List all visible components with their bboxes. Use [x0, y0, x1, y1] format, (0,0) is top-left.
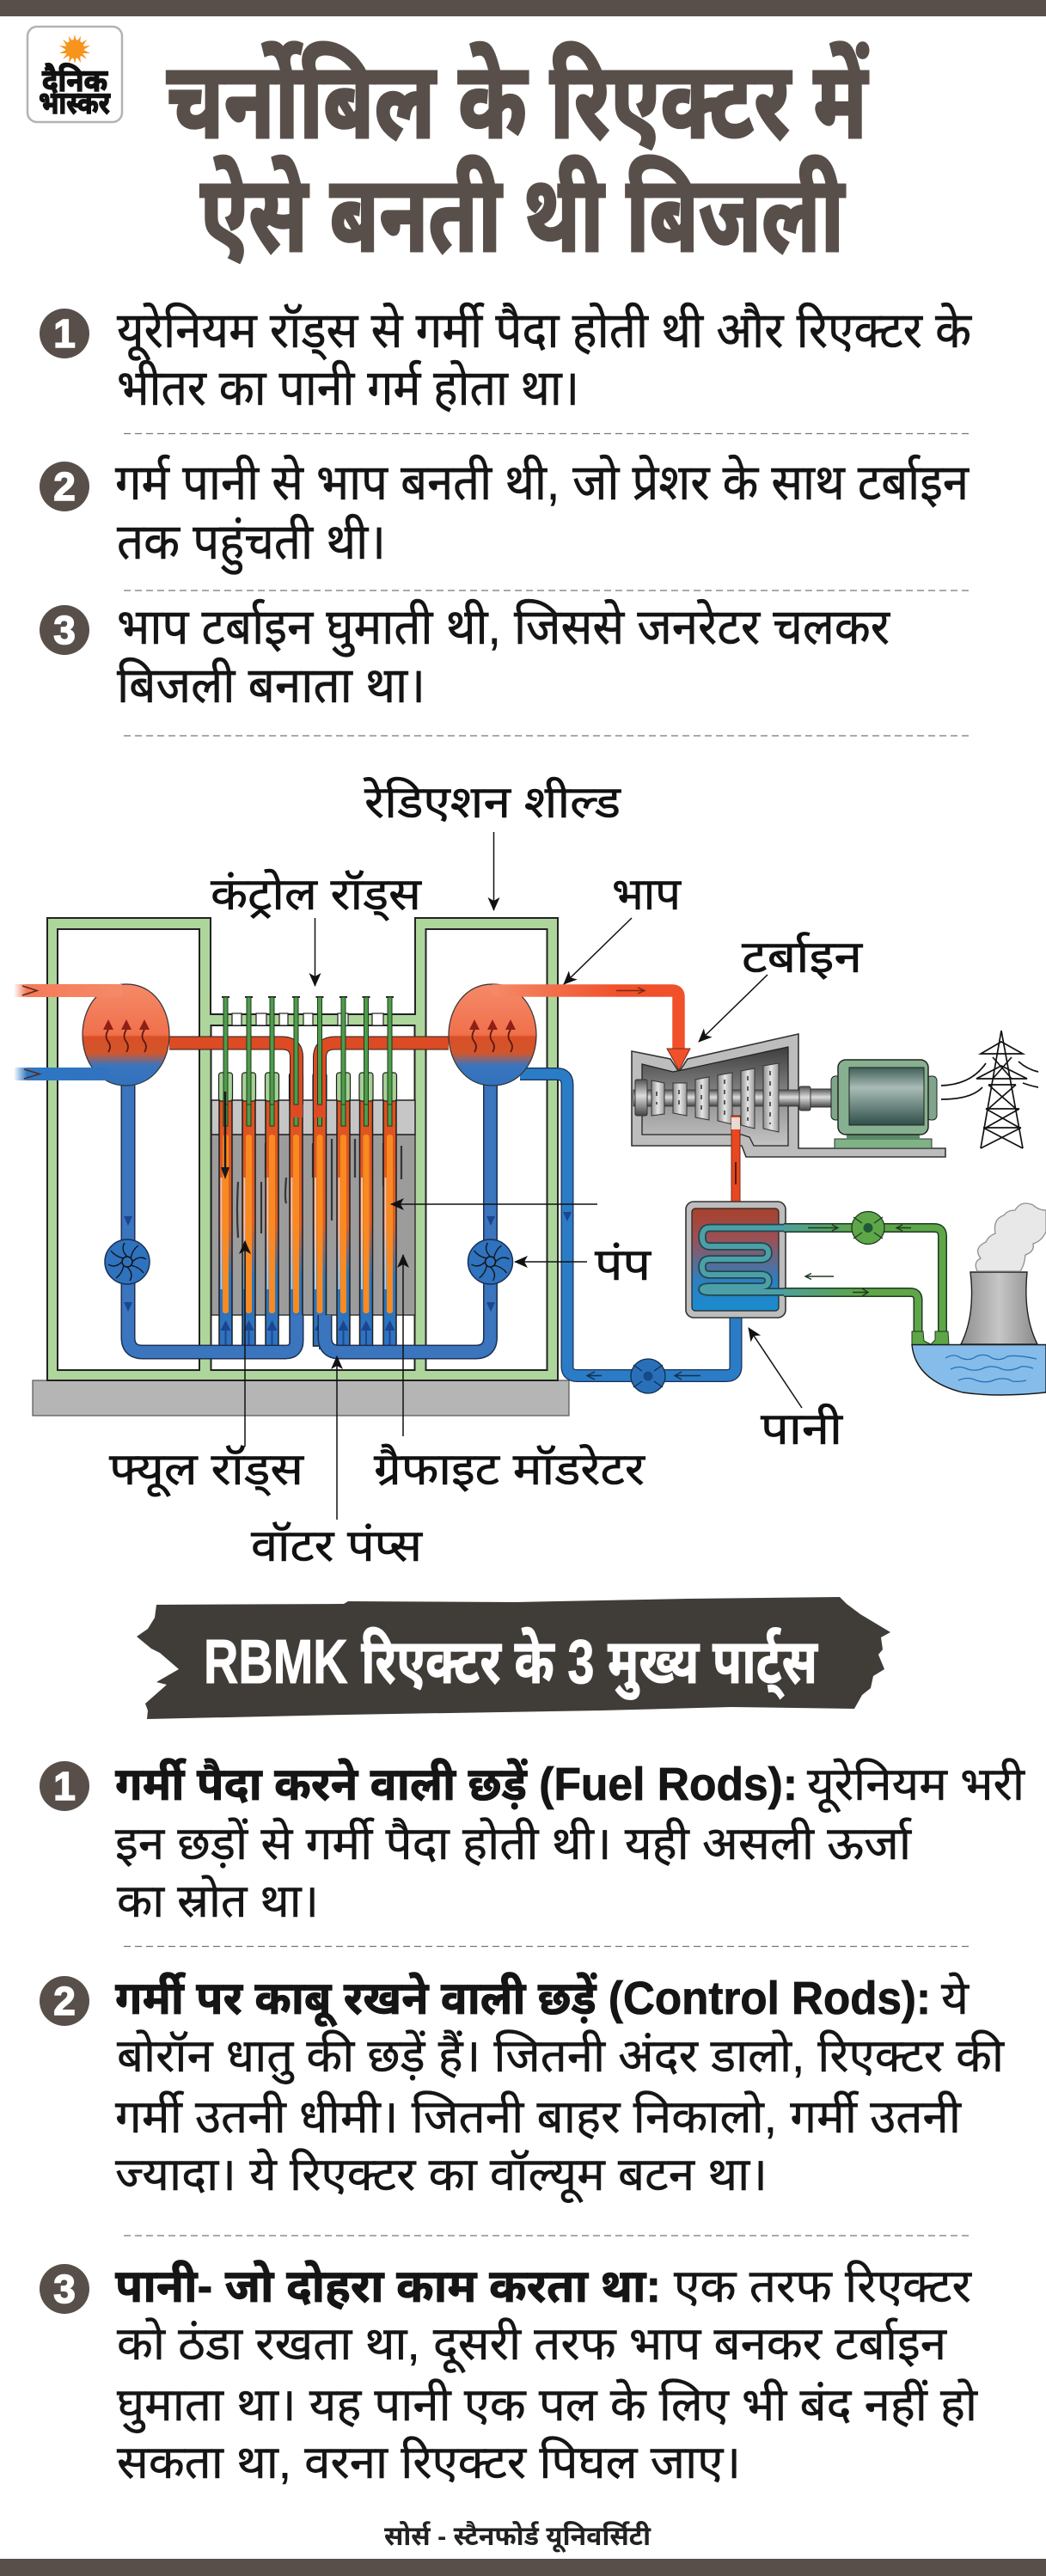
- label: graphite moderator: ग्रैफाइट मॉडरेटर: [374, 1444, 646, 1495]
- label: radiation shield: रेडिएशन शील्ड: [364, 777, 621, 828]
- part 3: water: पानी- जो दोहरा काम करता था:: [115, 2260, 661, 2312]
- condenser drain pipe: [731, 1116, 740, 1205]
- part 2: control rods: 2: [53, 1979, 76, 2023]
- logo: Dainik Bhaskar: दैनिक: [42, 62, 108, 98]
- step 1: 1: [53, 311, 76, 356]
- label: fuel rods: फ्यूल रॉड्स: [109, 1445, 304, 1497]
- part 1: fuel rods: गर्मी पैदा करने वाली छड़ें (Fuel Rods):: [115, 1758, 798, 1810]
- step 1: भीतर का पानी गर्म होता था।: [117, 360, 579, 416]
- step 2: [40, 455, 970, 575]
- top bar: [0, 0, 1046, 16]
- section banner: [137, 1597, 890, 1719]
- radiation shield walls: [47, 918, 558, 1380]
- label: steam: भाप: [612, 870, 682, 920]
- part 1: fuel rods: 1: [53, 1764, 76, 1808]
- cooling loop pump: [852, 1212, 884, 1245]
- part 2: control rods: ज्यादा। ये रिएक्टर का वॉल्यूम बटन था।: [115, 2148, 768, 2204]
- label: water pumps: वॉटर पंप्स: [251, 1521, 423, 1571]
- title: [167, 41, 869, 274]
- part 3: water: को ठंडा रखता था, दूसरी तरफ भाप बनकर टर्बाइन: [117, 2317, 947, 2373]
- pylon and wires: [941, 1031, 1038, 1148]
- cooling tower pond: [912, 1344, 1046, 1395]
- cold water loop: [128, 1074, 736, 1375]
- cooling tower: [961, 1272, 1037, 1344]
- step 3: [40, 599, 890, 713]
- part 2: control rods: [40, 1972, 1005, 2204]
- control rods over pipe: [223, 997, 392, 1104]
- logo: Dainik Bhaskar: भास्कर: [39, 85, 111, 120]
- step 3: बिजली बनाता था।: [117, 658, 425, 713]
- fuel channels and control rods: [218, 997, 397, 1349]
- steam drum left: [14, 984, 169, 1086]
- logo: Dainik Bhaskar: [28, 27, 122, 122]
- label: water: पानी: [761, 1404, 844, 1454]
- label: pump: पंप: [595, 1240, 652, 1290]
- title: ऐसे बनती थी बिजली: [200, 156, 846, 274]
- shield roof notches: [232, 1013, 383, 1025]
- ground slab: [33, 1380, 569, 1416]
- step 3: भाप टर्बाइन घुमाती थी, जिससे जनरेटर चलकर: [117, 599, 890, 658]
- step 1: यूरेनियम रॉड्स से गर्मी पैदा होती थी और रिएक्टर के: [117, 303, 972, 362]
- hot steam pipes: [169, 1043, 449, 1117]
- step 2: गर्म पानी से भाप बनती थी, जो प्रेशर के साथ टर्बाइन: [115, 455, 970, 511]
- title: चर्नोबिल के रिएक्टर में: [167, 41, 869, 161]
- label: control rods: कंट्रोल रॉड्स: [211, 870, 422, 921]
- part 3: water: घुमाता था। यह पानी एक पल के लिए भी बंद नहीं हो: [117, 2378, 978, 2433]
- label arrows: [245, 832, 802, 1520]
- part 3: water: 3: [53, 2267, 76, 2311]
- part 2: control rods: बोरॉन धातु की छड़ें हैं। जितनी अंदर डालो, रिएक्टर की: [117, 2029, 1005, 2084]
- steam drum right: [449, 984, 536, 1086]
- condenser: [686, 1202, 786, 1318]
- reactor diagram: [14, 777, 1046, 1571]
- generator: [831, 1060, 937, 1148]
- part 3: water: सकता था, वरना रिएक्टर पिघल जाए।: [117, 2436, 741, 2488]
- label: turbine: टर्बाइन: [742, 932, 863, 982]
- part 3: water: [40, 2260, 978, 2488]
- source: सोर्स - स्टैनफोर्ड यूनिवर्सिटी: [384, 2521, 651, 2553]
- part 3: water: एक तरफ रिएक्टर: [674, 2260, 972, 2312]
- step 1: [40, 303, 972, 416]
- part 1: fuel rods: यूरेनियम भरी: [807, 1758, 1025, 1814]
- part 1: fuel rods: इन छड़ों से गर्मी पैदा होती थी। यही असली ऊर्जा: [115, 1816, 912, 1869]
- section banner: RBMK रिएक्टर के 3 मुख्य पार्ट्स: [204, 1627, 818, 1700]
- step 2: 2: [53, 464, 76, 509]
- steam line to turbine: [492, 988, 690, 1070]
- part 2: control rods: गर्मी पर काबू रखने वाली छड़ें (Control Rods):: [115, 1972, 931, 2028]
- flow arrows: [124, 1212, 572, 1312]
- graphite block: [211, 1100, 415, 1315]
- water loop pump: [587, 1359, 700, 1393]
- step 2: तक पहुंचती थी।: [117, 514, 386, 575]
- part 2: control rods: ये: [941, 1972, 970, 2024]
- part 2: control rods: गर्मी उतनी धीमी। जितनी बाहर निकालो, गर्मी उतनी: [115, 2090, 962, 2143]
- steam cloud: [976, 1203, 1046, 1271]
- part 1: fuel rods: [40, 1758, 1025, 1927]
- turbine: [632, 1034, 945, 1157]
- cooling water pipes: [784, 1225, 949, 1344]
- icon: sun: [59, 34, 90, 64]
- main pumps: [105, 1239, 512, 1284]
- step 3: 3: [53, 608, 76, 652]
- part 1: fuel rods: का स्रोत था।: [117, 1875, 319, 1927]
- rod insertion arrow: [221, 1092, 229, 1179]
- bottom bar: [0, 2559, 1046, 2576]
